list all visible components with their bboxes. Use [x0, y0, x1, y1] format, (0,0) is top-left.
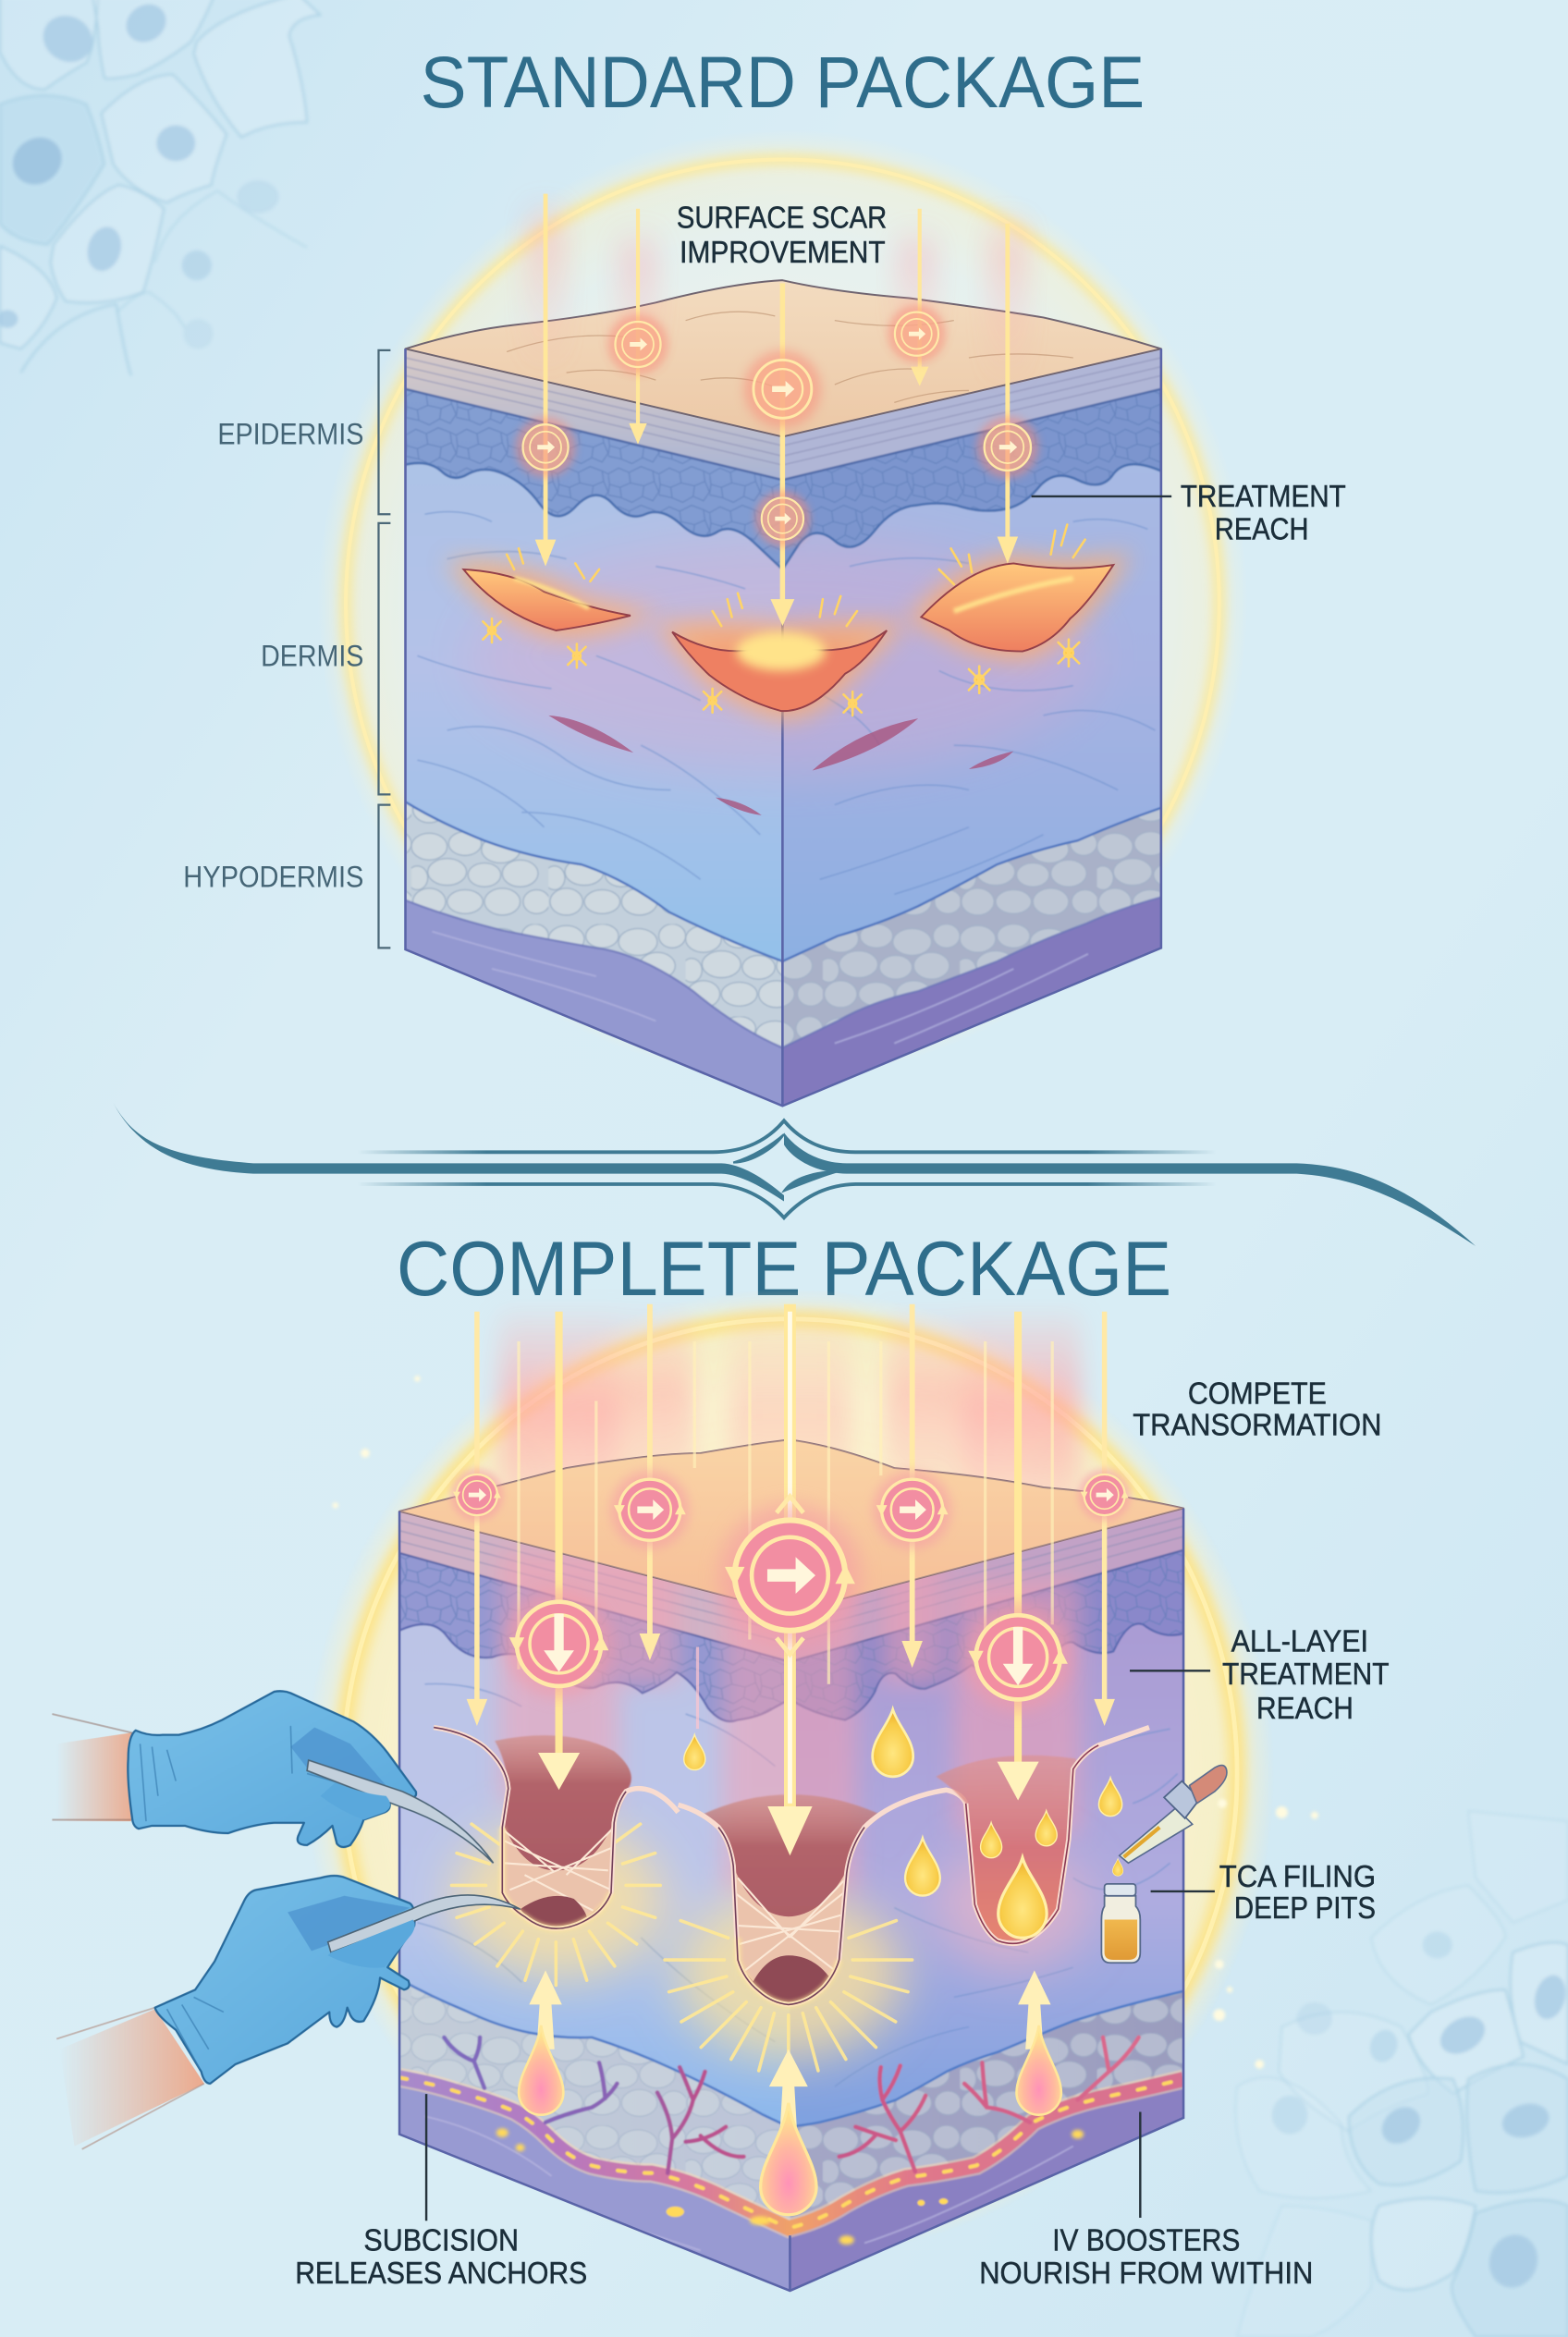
label: compete transformation: COMPETE: [1188, 1377, 1327, 1412]
label: treatment reach: REACH: [1215, 513, 1308, 547]
skin cube: standard package: [404, 280, 1161, 1106]
upper tweezers: [307, 1760, 494, 1863]
icon: dropper: [1112, 1766, 1227, 1876]
stratum band: [399, 1509, 1183, 1662]
label: all-layer treatment reach: REACH: [1256, 1692, 1354, 1726]
nuclei top left: [0, 0, 278, 349]
pink beam columns above cube: [499, 1312, 1081, 1565]
label: TCA filling deep pits: DEEP PITS: [1234, 1891, 1376, 1926]
hand: lower gloved hand with tweezers: [56, 1876, 521, 2149]
arrow 3: [743, 283, 821, 626]
halo: complete package: [305, 1290, 1274, 2257]
arrow 4: [719, 1304, 861, 1855]
top skin surface: [406, 280, 1161, 436]
deep pit 3 filled with TCA: [936, 1728, 1149, 1943]
cube edges: [406, 349, 1161, 1106]
label: all-layer treatment reach: [1130, 1624, 1390, 1726]
cube edges: [399, 1509, 1183, 2291]
arrow 5: [873, 1304, 951, 1668]
deep pit 2 with collagen anchors: [679, 1790, 966, 2004]
label: treatment reach: TREATMENT: [1181, 480, 1346, 514]
thin light rays: [519, 1341, 1052, 1729]
blood vessel: [399, 2037, 1183, 2245]
scar 1: [463, 569, 631, 630]
TCA droplets: [684, 1709, 1122, 1938]
sparks around scars: [483, 525, 1085, 716]
arrow 3: [611, 1304, 689, 1660]
label: all-layer treatment reach: ALL-LAYEI: [1231, 1624, 1368, 1658]
epidermis cell layer: [404, 373, 1161, 569]
background cells top left: [0, 0, 321, 375]
label: TCA filling deep pits: [1151, 1860, 1376, 1926]
label: surface scar improvement: [677, 202, 887, 270]
pink energy wash in skin: [499, 1550, 1081, 1893]
label: surface scar improvement: SURFACE SCAR: [677, 202, 887, 236]
background cells bottom right: [1235, 1811, 1568, 2337]
lower forearm: [56, 2008, 204, 2149]
lower glove: [155, 1876, 415, 2084]
glowing nutrient specks: [496, 2128, 1084, 2245]
epidermis cell layer: [399, 1536, 1183, 1721]
hand: upper gloved hand with tweezers: [52, 1691, 494, 1863]
warm glow around pits: [455, 1823, 1088, 2057]
label: IV boosters nourish from within: [979, 2112, 1313, 2291]
top skin surface: [399, 1439, 1183, 1612]
layer brackets: [378, 350, 390, 948]
icon: TCA vial: [1101, 1884, 1140, 1963]
deep pit 1 with collagen anchors: [434, 1728, 679, 1928]
label: hypodermis: HYPODERMIS: [183, 860, 363, 893]
label: IV boosters nourish from within: NOURISH FROM WITHIN: [979, 2257, 1313, 2291]
label: all-layer treatment reach: TREATMENT: [1222, 1658, 1390, 1692]
label: treatment reach: [1032, 480, 1346, 547]
label: subcision releases anchors: RELEASES ANCHORS: [295, 2257, 587, 2291]
bottom layer: [407, 897, 1160, 1104]
arrows and energy nodes: standard package: [515, 194, 1038, 626]
arrow 7: [1078, 1312, 1131, 1726]
label: dermis: DERMIS: [261, 640, 363, 673]
label: IV boosters nourish from within: IV BOOSTERS: [1052, 2223, 1240, 2257]
halo: standard package: [317, 129, 1247, 1078]
label: TCA filling deep pits: TCA FILING: [1219, 1860, 1376, 1894]
upper glove: [128, 1691, 416, 1847]
label: subcision releases anchors: [295, 2094, 587, 2291]
scar 2: [672, 630, 887, 711]
label: compete transformation: [1133, 1377, 1381, 1443]
dermis layer: [400, 1623, 1182, 2128]
stratum band: [406, 349, 1161, 480]
radial rays around pits: [451, 1824, 913, 2074]
small healed scars: [548, 716, 1013, 815]
sparkles: [333, 1376, 1318, 2069]
arrow 1: [451, 1312, 503, 1726]
label: epidermis: EPIDERMIS: [217, 417, 363, 450]
hypodermis layer: [400, 1986, 1182, 2221]
label: surface scar improvement: IMPROVEMENT: [680, 236, 886, 270]
dermis layer: [407, 464, 1160, 963]
upper forearm: [52, 1714, 137, 1821]
arrow 2: [505, 1312, 613, 1790]
lower tweezers: [328, 1895, 521, 1952]
divider swoosh: [114, 1103, 1476, 1246]
bottom layer: [400, 2086, 1182, 2289]
arrows and energy nodes: complete package: [333, 1304, 1318, 2069]
vessel branches: [444, 2037, 1139, 2173]
label: compete transformation: TRANSORMATION: [1133, 1409, 1381, 1443]
title: complete package: COMPLETE PACKAGE: [397, 1225, 1171, 1312]
title: standard package: STANDARD PACKAGE: [421, 41, 1145, 123]
arrow 5: [976, 224, 1038, 563]
skin cube: complete package: [399, 1439, 1183, 2291]
upward booster arrows: [519, 1970, 1061, 2215]
arrow 4: [888, 209, 946, 386]
arrow 2: [607, 209, 668, 444]
scar 3: [921, 563, 1113, 652]
nuclei bottom right: [1272, 1931, 1568, 2294]
arrow 1: [515, 194, 576, 567]
arrow 6: [964, 1312, 1072, 1801]
label: subcision releases anchors: SUBCISION: [363, 2223, 519, 2257]
hypodermis layer: [407, 802, 1160, 1048]
